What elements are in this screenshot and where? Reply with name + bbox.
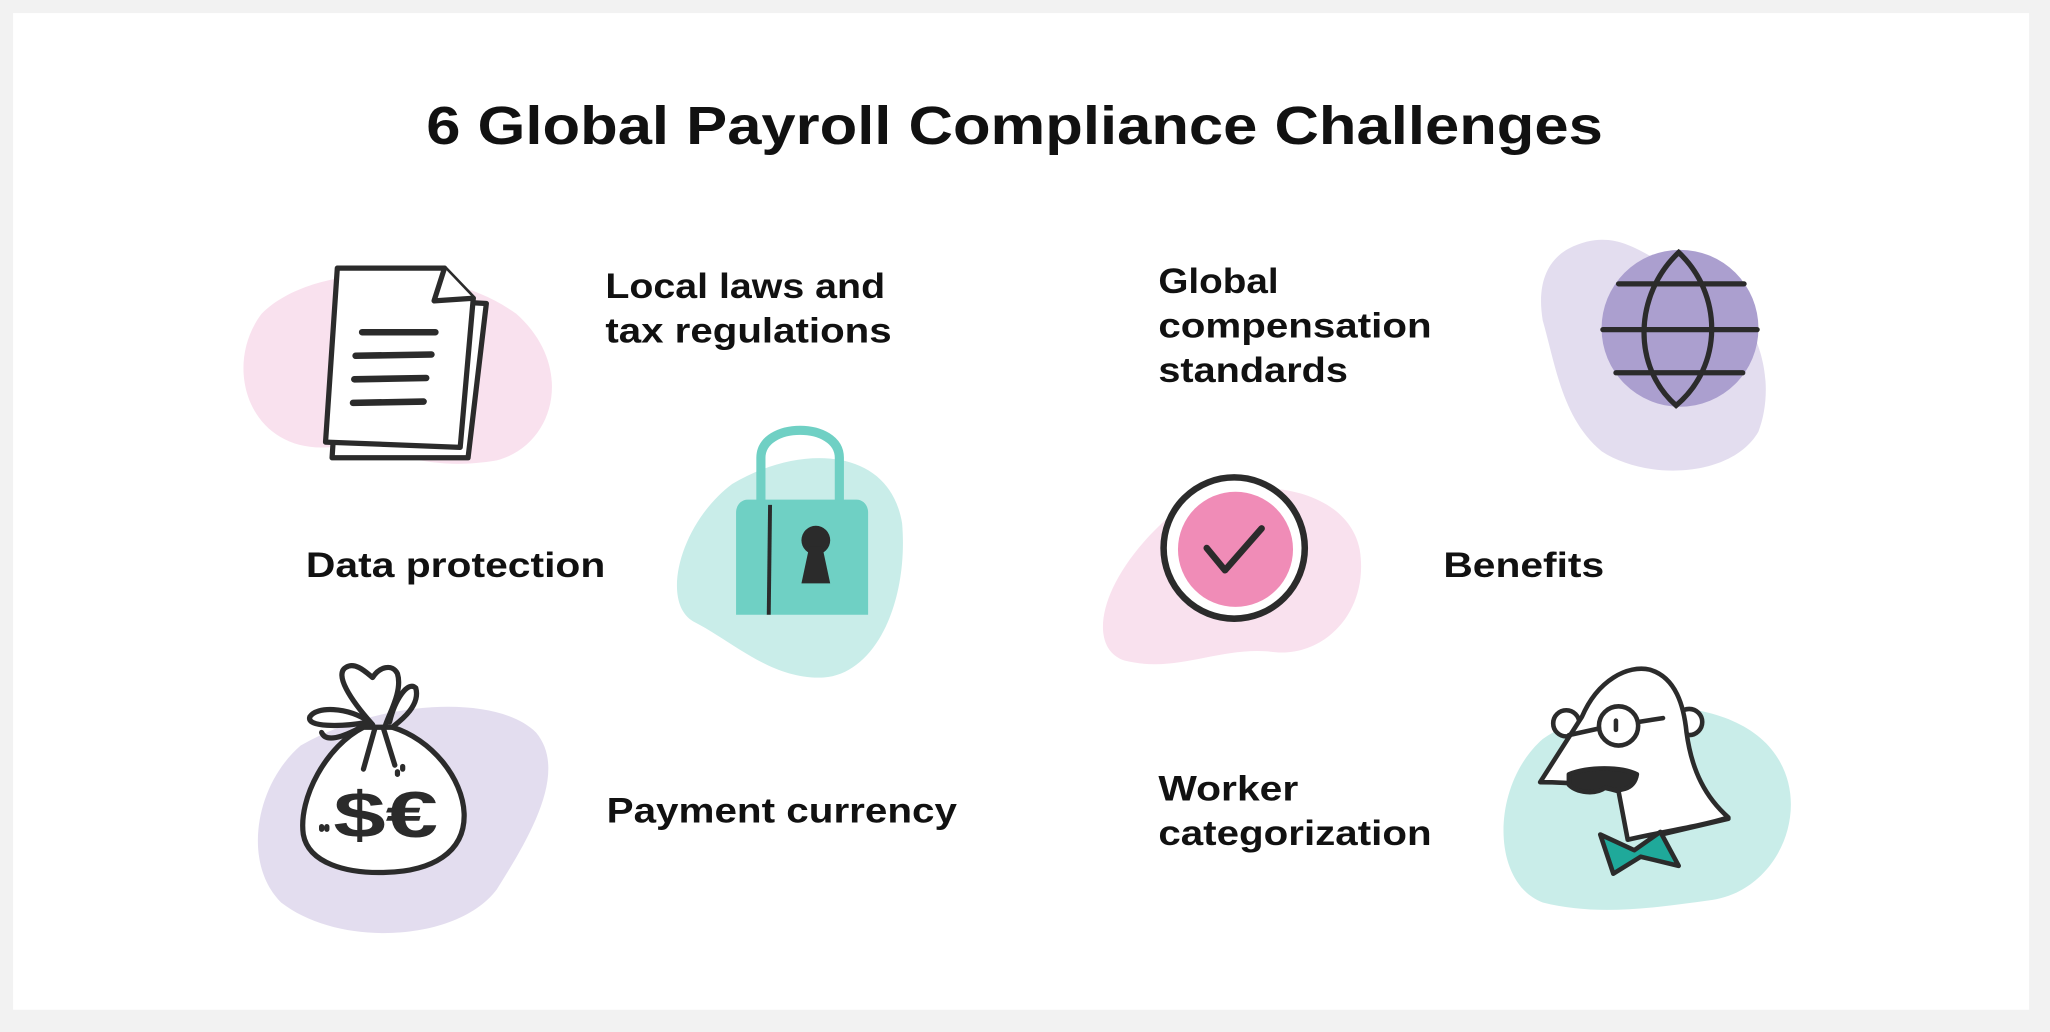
item: local laws <box>243 267 892 464</box>
item: worker categorization: categorization <box>1158 814 1432 853</box>
icon: globe <box>1602 250 1758 407</box>
blob lavender <box>258 707 548 933</box>
blob lavender <box>1541 240 1766 471</box>
item: worker categorization <box>1158 669 1791 910</box>
text: Worker <box>1158 769 1299 808</box>
blob teal <box>1504 707 1791 910</box>
blob teal <box>677 458 903 678</box>
item: data protection <box>306 430 903 678</box>
text: Payment currency <box>607 792 957 831</box>
item: global compensation: standards <box>1158 351 1348 390</box>
item: global compensation <box>1158 240 1766 471</box>
item: global compensation: compensation <box>1158 306 1432 345</box>
text: Local laws and <box>605 267 885 306</box>
item: payment currency: $€ <box>333 778 438 851</box>
blob pink <box>243 275 552 464</box>
title: 6 Global Payroll Compliance Challenges <box>426 96 1603 156</box>
item: payment currency <box>258 666 957 933</box>
icon: document <box>326 268 486 458</box>
text: Data protection <box>306 546 605 585</box>
blob pink <box>1103 488 1361 664</box>
icon: money bag <box>303 666 464 873</box>
item: benefits <box>1103 477 1604 664</box>
text: Benefits <box>1443 546 1604 585</box>
icon: man <box>1540 669 1728 874</box>
icon: lock <box>761 430 839 502</box>
text: Global <box>1158 262 1279 301</box>
icon: check circle <box>1164 477 1305 619</box>
item: local laws: tax regulations <box>605 312 892 351</box>
